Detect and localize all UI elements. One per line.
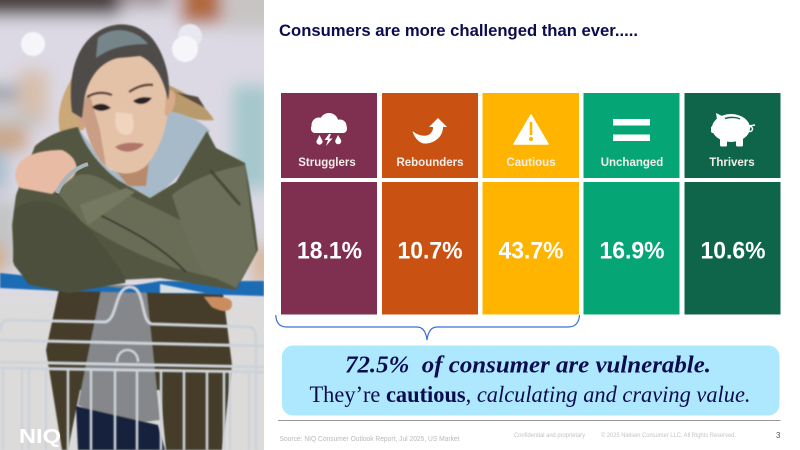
blond hair (59, 78, 214, 132)
icon: piggy bank (711, 113, 755, 146)
panel: thrivers (684, 93, 780, 314)
label: Cautious: Cautious (506, 157, 556, 169)
percent: thrivers: 10.6% (700, 238, 766, 264)
panel: strugglers (281, 93, 377, 314)
percent: unchanged: 16.9% (600, 238, 664, 264)
face (74, 53, 175, 173)
panel: cautious (482, 93, 579, 314)
photo: worried woman leaning on a shopping cart (0, 0, 290, 450)
NIQ logo: NIQ (19, 426, 61, 448)
hand (15, 150, 77, 194)
page number: 3 (776, 431, 781, 440)
label: Rebounders: Rebounders (396, 157, 464, 169)
copyright: © 2025 Nielsen Consumer LLC. All Rights Reserved. (601, 432, 736, 439)
cart blue handle (0, 273, 264, 296)
label: Thrivers: Thrivers (709, 157, 755, 169)
dark grey hair (71, 24, 169, 118)
confidentiality note: Confidential and proprietary (514, 432, 586, 439)
source note: Source: NIQ Consumer Outlook Report, Jul 2025, US Market (280, 434, 460, 443)
percent: cautious: 43.7% (498, 238, 564, 264)
callout (282, 346, 780, 416)
label: Strugglers: Strugglers (298, 157, 356, 169)
callout headline: 72.5% of consumer are vulnerable. (345, 352, 711, 378)
label: Unchanged: Unchanged (601, 157, 663, 169)
jacket upper (12, 127, 258, 293)
icon: rebound arrow (412, 118, 447, 144)
icon: equals (613, 119, 650, 141)
lower body and arm behind the handle (46, 285, 232, 450)
panel: unchanged (584, 93, 680, 314)
store lights (21, 24, 202, 62)
footer rule (278, 420, 780, 422)
callout subline: They’re cautious, calculating and craving value. (310, 382, 750, 407)
title: Consumers are more challenged than ever..... (279, 21, 638, 40)
icon: storm cloud (311, 113, 347, 146)
neck (116, 162, 150, 187)
pale sticker on handle (160, 284, 205, 293)
percent: strugglers: 18.1% (297, 238, 362, 264)
sleeve cuff (57, 164, 88, 193)
percent: rebounders: 10.7% (398, 238, 462, 264)
blurred store background (0, 0, 290, 450)
cart wires (0, 287, 264, 450)
bracket (276, 315, 580, 340)
icon: warning triangle (514, 115, 548, 144)
panel: rebounders (382, 93, 478, 314)
hood (78, 110, 210, 198)
